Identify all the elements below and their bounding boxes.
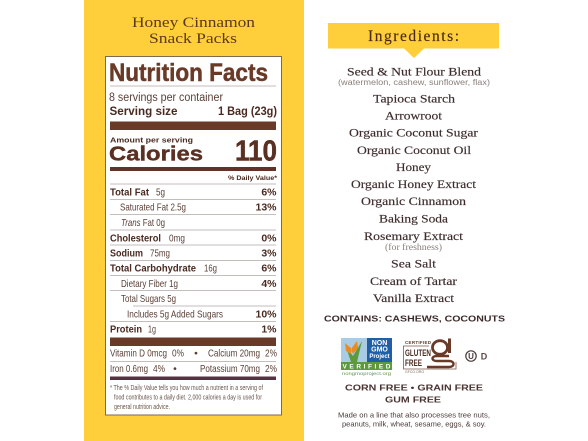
nutrient table: Trans Fat 0g — [121, 217, 165, 229]
vitamins and minerals: Iron 0.6mg — [110, 363, 148, 375]
vitamins and minerals: Potassium 70mg — [200, 363, 260, 375]
nutrient table: Total Sugars 5g — [121, 293, 176, 305]
vitamins and minerals: 2% — [265, 363, 277, 375]
ingredients list: (for freshness) — [385, 242, 442, 252]
icon: kosher OU mark: U — [468, 352, 474, 361]
allergen processing note: peanuts, milk, wheat, sesame, eggs, & soy. — [342, 420, 486, 428]
panel: nutrition facts label — [106, 56, 282, 415]
serving information: Serving size — [110, 106, 178, 118]
nutrient table: 6% — [261, 262, 277, 274]
nutrient table: Cholesterol — [110, 232, 161, 244]
icon: kosher OU mark: D — [481, 352, 488, 362]
panel: nutrition yellow background — [84, 0, 304, 441]
vitamins and minerals: • — [194, 348, 198, 360]
icon: Non-GMO Project Verified: GMO — [371, 346, 388, 354]
icon: Non-GMO Project Verified: NON — [372, 340, 387, 347]
ingredients list: Organic Cinnamon — [361, 196, 466, 208]
icon: certified gluten free: FREE — [405, 358, 422, 369]
allergen processing note: Made on a line that also processes tree nuts, — [338, 410, 490, 420]
nutrient table: Includes 5g Added Sugars — [127, 308, 223, 320]
nutrient table: 4% — [261, 278, 277, 290]
icon: kosher OU mark — [466, 351, 488, 362]
icon: Non-GMO Project Verified: VERIFIED — [342, 364, 391, 370]
ingredients list: Organic Coconut Sugar — [349, 128, 478, 140]
calories — [109, 136, 277, 168]
vitamins and minerals: • — [173, 363, 177, 375]
nutrient table: Dietary Fiber 1g — [121, 278, 178, 290]
nutrient table: Saturated Fat 2.5g — [120, 202, 186, 214]
vitamins and minerals: 0% — [172, 348, 184, 360]
free-from claims — [345, 382, 483, 404]
heading banner: ingredients: Ingredients: — [368, 28, 460, 45]
footnote — [110, 385, 263, 411]
nutrient table: Total Carbohydrate — [110, 262, 196, 274]
vitamins and minerals: Calcium 20mg — [208, 348, 260, 360]
nutrient table: Sodium — [110, 248, 143, 260]
icon: certified gluten free: GFCO.ORG — [405, 370, 424, 374]
heading: product name: Snack Packs — [149, 31, 237, 47]
nutrient table: 1% — [261, 324, 277, 336]
ingredients list: Sea Salt — [391, 258, 437, 270]
serving information: 8 servings per container — [109, 92, 223, 104]
heading: product name — [132, 15, 256, 47]
icon: certified gluten free — [404, 338, 456, 374]
ingredients list: Organic Honey Extract — [351, 179, 477, 191]
ingredients list: Cream of Tartar — [370, 276, 457, 288]
icon: Non-GMO Project Verified — [341, 338, 392, 376]
ingredients list: Vanilla Extract — [373, 293, 455, 305]
ingredients list — [338, 66, 490, 305]
footnote: * The % Daily Value tells you how much a nutrient in a serving of — [110, 385, 263, 392]
ingredients list: Arrowroot — [385, 110, 443, 122]
nutrient table: 75mg — [150, 248, 170, 260]
vitamins and minerals — [110, 348, 277, 375]
serving information: 1 Bag (23g) — [218, 106, 277, 118]
ingredients list: Honey — [396, 162, 431, 174]
footnote: general nutrition advice. — [114, 404, 170, 411]
icon: certified gluten free: CERTIFIED — [405, 340, 432, 345]
nutrient table: 1g — [148, 324, 156, 336]
icon: Non-GMO Project Verified: nongmoproject.org — [342, 371, 392, 376]
nutrient table: 13% — [255, 202, 277, 214]
calories: Calories — [109, 144, 203, 166]
title: Nutrition Facts: Nutrition Facts — [109, 59, 268, 87]
nutrient table: 0mg — [169, 232, 185, 244]
vitamins and minerals: Vitamin D 0mcg — [110, 348, 167, 360]
nutrient table: 6% — [261, 186, 277, 198]
icon: certified gluten free: GLUTEN — [405, 348, 431, 359]
vitamins and minerals: 4% — [153, 363, 165, 375]
nutrient table — [110, 184, 277, 336]
nutrient table: 5g — [156, 186, 165, 198]
nutrient table: Total Fat — [110, 186, 149, 198]
free-from claims: GUM FREE — [385, 394, 441, 404]
heading banner: ingredients — [328, 23, 499, 58]
free-from claims: CORN FREE • GRAIN FREE — [345, 382, 483, 392]
nutrient table: 0% — [261, 232, 277, 244]
ingredients list: Tapioca Starch — [373, 94, 455, 106]
calories: 110 — [235, 136, 277, 168]
heading: product name: Honey Cinnamon — [132, 15, 256, 31]
calories: Amount per serving — [110, 136, 193, 144]
ingredients list: Rosemary Extract — [364, 231, 464, 243]
vitamins and minerals: 2% — [265, 348, 277, 360]
ingredients list: Organic Coconut Oil — [357, 145, 471, 157]
footnote: food contributes to a daily diet. 2,000 calories a day is used for — [114, 394, 262, 402]
nutrient table: 10% — [255, 308, 277, 320]
icon: Non-GMO Project Verified: Project — [369, 354, 390, 360]
allergen statement: CONTAINS: CASHEWS, COCONUTS — [324, 314, 506, 324]
allergen processing note — [338, 410, 490, 428]
nutrient table: 3% — [261, 248, 277, 260]
daily value header: % Daily Value* — [228, 175, 278, 182]
ingredients list: (watermelon, cashew, sunflower, flax) — [338, 78, 490, 87]
serving information — [109, 92, 277, 118]
ingredients list: Baking Soda — [379, 214, 448, 226]
nutrient table: 16g — [204, 262, 217, 274]
nutrient table: Protein — [110, 324, 142, 336]
ingredients list: Seed & Nut Flour Blend — [347, 66, 481, 78]
